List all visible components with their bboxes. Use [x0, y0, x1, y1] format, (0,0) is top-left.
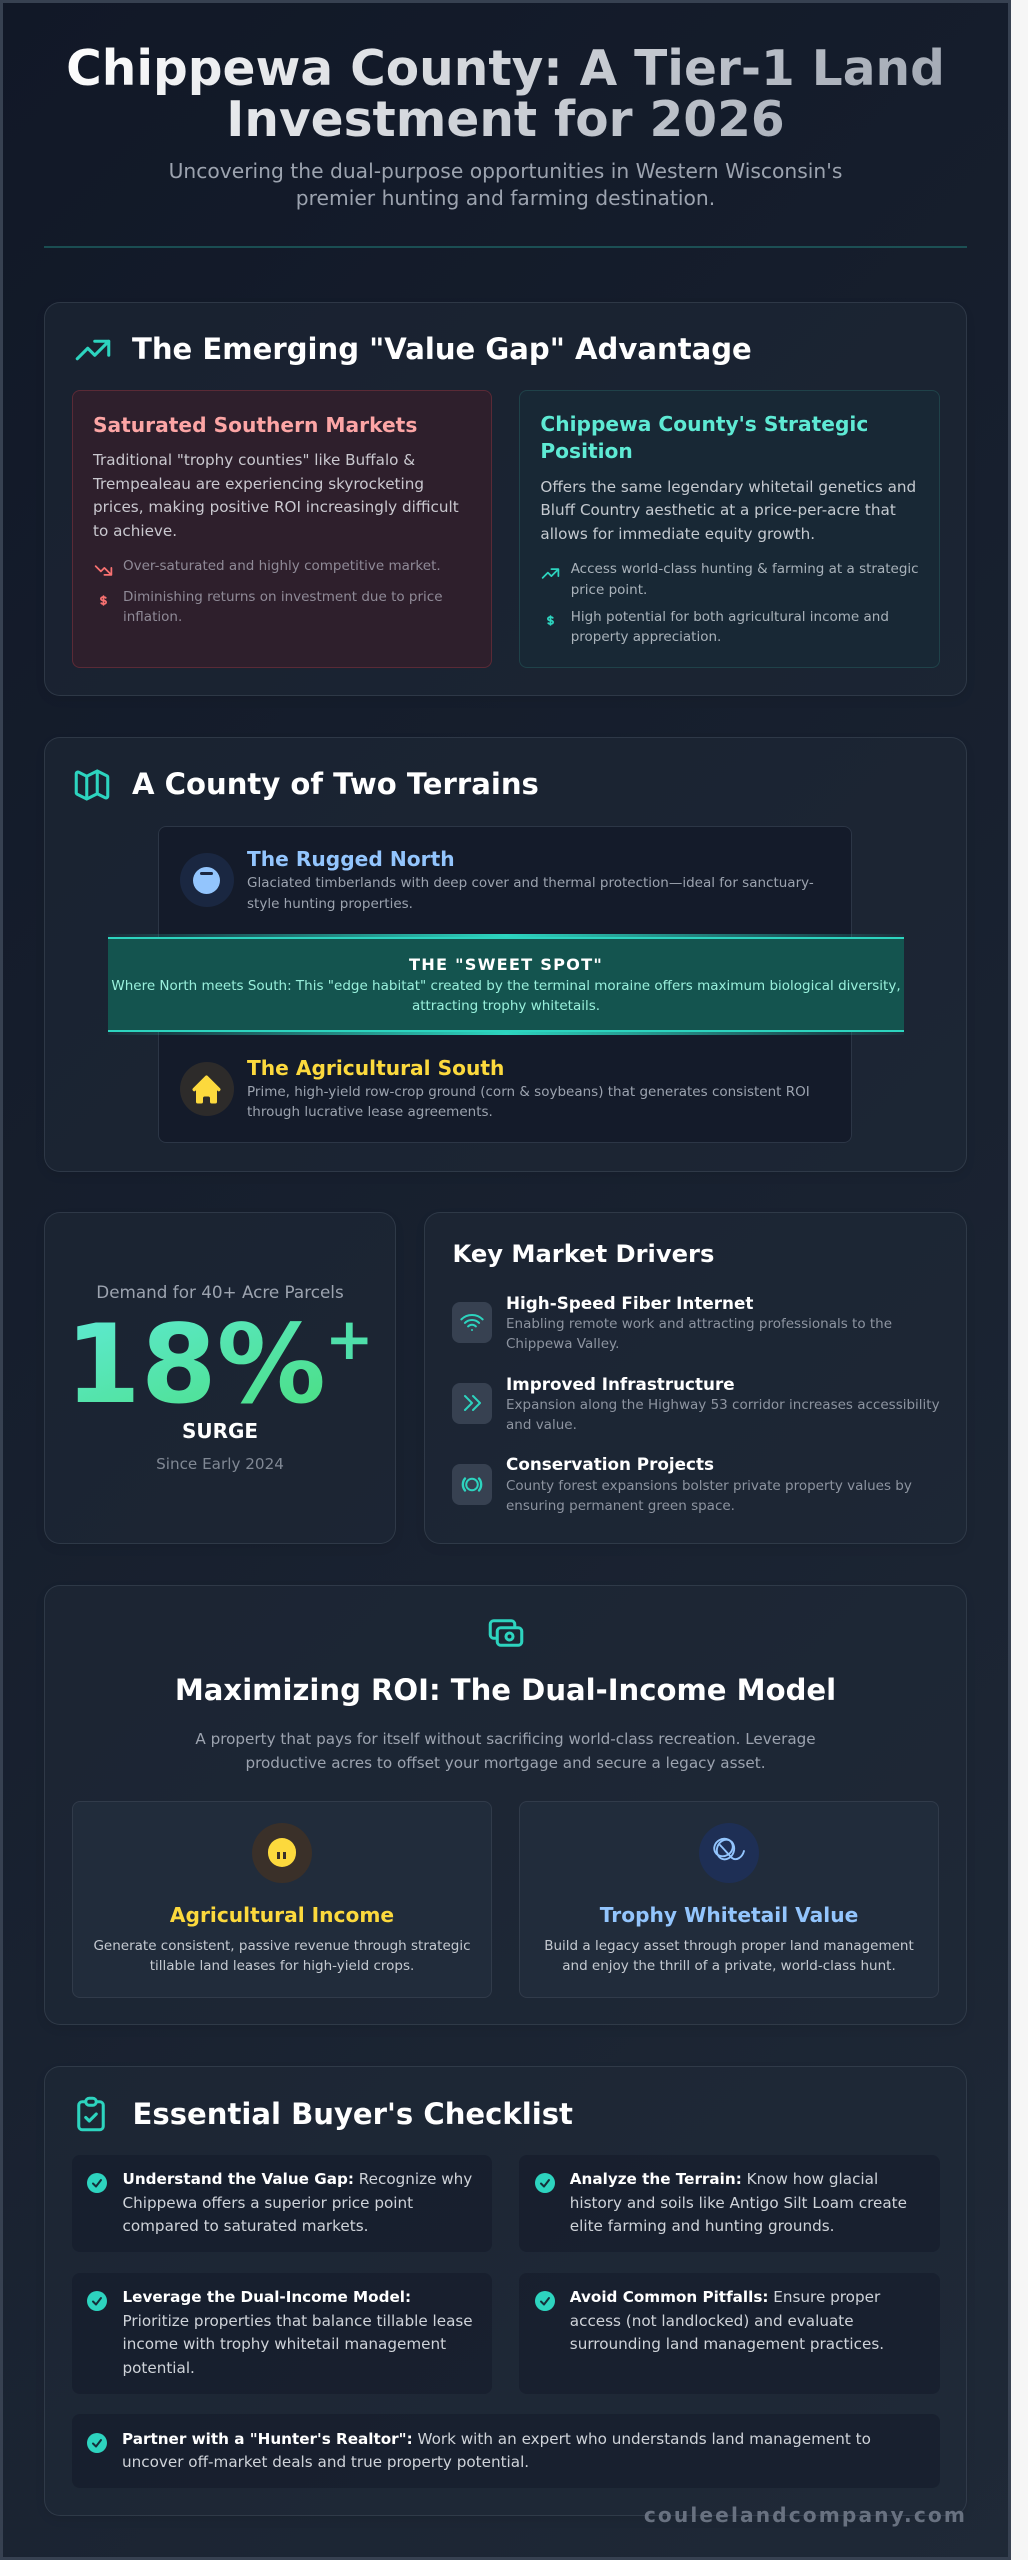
- panel: dual-income model: [44, 1585, 967, 2025]
- heading: strategic position: Position: [540, 439, 633, 463]
- heading: buyer's checklist: Essential Buyer's Checklist: [132, 2097, 573, 2131]
- text: dual income: Leverage the Dual-Income Model:: [122, 2288, 411, 2306]
- heading: key market drivers: Key Market Drivers: [452, 1240, 714, 1268]
- text: strategic position description: Bluff Country aesthetic at a price-per-acre that: [540, 501, 896, 519]
- subtitle: premier hunting and farming destination.: [296, 186, 715, 210]
- title: Chippewa County: A Tier-1 Land: [66, 41, 945, 97]
- icon: check: [87, 2433, 107, 2453]
- text: value gap: compared to saturated markets.: [122, 2217, 368, 2235]
- icon: north badge: [180, 853, 234, 907]
- watermark: couleelandcompany.com: [644, 2503, 967, 2527]
- text: agricultural income description: [93, 1938, 471, 1974]
- heading: agricultural income: Agricultural Income: [170, 1903, 394, 1927]
- text: terrain: history and soils like Antigo Silt Loam create: [570, 2194, 907, 2212]
- text: conservation description: County forest expansions bolster private property values by: [506, 1478, 912, 1494]
- text: sweet spot description: attracting trophy whitetails.: [412, 998, 600, 1014]
- icon: coin: [268, 1838, 296, 1867]
- panel: saturated southern markets: [72, 390, 492, 668]
- panel: agricultural income: [72, 1801, 492, 1998]
- text: world-class access point: price point.: [571, 582, 647, 598]
- icon: trending up: [76, 340, 110, 360]
- heading: trophy whitetail value: Trophy Whitetail Value: [600, 1903, 858, 1927]
- text: diminishing returns point: inflation.: [123, 609, 182, 625]
- text: dual income: Prioritize properties that balance tillable lease: [122, 2312, 473, 2330]
- heading: strategic position: Chippewa County's Strategic: [540, 412, 868, 436]
- panel: terrain stack: [158, 826, 852, 1143]
- icon: dollar small: [547, 615, 554, 626]
- text: saturated markets description: Traditional "trophy counties" like Buffalo &: [93, 451, 415, 469]
- checklist item: pitfalls: [519, 2273, 940, 2394]
- text: pitfalls: surrounding land management practices.: [570, 2335, 884, 2353]
- icon: trending down: [94, 565, 112, 576]
- text: fiber internet description: Enabling remote work and attracting professionals to the: [506, 1316, 892, 1332]
- text: sweet spot description: Where North meets South: This "edge habitat" created by the terminal moraine offers maximum biological diversity,: [111, 978, 901, 994]
- text: rugged north description: Glaciated timberlands with deep cover and thermal protection—ideal for sanctuary-: [247, 875, 814, 891]
- text: diminishing returns point: Diminishing returns on investment due to price: [123, 589, 443, 605]
- text: hunter's realtor: uncover off-market deals and true property potential.: [122, 2453, 529, 2471]
- text: saturated markets description: to achieve.: [93, 522, 177, 540]
- icon: looped lines: [713, 1838, 745, 1860]
- text: agricultural income description: tillable land leases for high-yield crops.: [150, 1958, 414, 1974]
- checklist item: terrain: [519, 2155, 940, 2252]
- heading: agricultural south: The Agricultural South: [247, 1056, 504, 1080]
- icon: south badge: [180, 1062, 234, 1116]
- text: strategic position description: Offers the same legendary whitetail genetics and: [540, 478, 916, 496]
- text: dual income: income with trophy whitetail management: [122, 2335, 446, 2353]
- heading: saturated markets: Saturated Southern Markets: [93, 413, 417, 437]
- text: infrastructure description: [506, 1397, 940, 1433]
- text: surge: SURGE: [182, 1419, 258, 1443]
- text: fiber internet description: [506, 1316, 892, 1352]
- callout: sweet spot: [108, 937, 904, 1032]
- icon: clipboard check: [77, 2096, 105, 2132]
- heading: dual-income model: Maximizing ROI: The Dual-Income Model: [175, 1673, 836, 1707]
- checklist item: dual income: [72, 2273, 492, 2394]
- text: strategic position description: allows for immediate equity growth.: [540, 525, 815, 543]
- text: agricultural income description: Generate consistent, passive revenue through strategic: [93, 1938, 471, 1954]
- text: hunter's realtor: Partner with a "Hunter's Realtor": Work with an expert who understands land management to: [122, 2430, 871, 2448]
- text: rugged north description: [247, 875, 814, 912]
- icon: check: [535, 2173, 555, 2193]
- panel: buyer's checklist: [44, 2066, 967, 2516]
- text: saturated markets description: prices, making positive ROI increasingly difficult: [93, 498, 459, 516]
- panel: value gap advantage: [44, 302, 967, 696]
- text: high potential point: [571, 609, 889, 645]
- title: Investment for 2026: [226, 92, 785, 148]
- text: dual-income intro: [195, 1730, 816, 1772]
- text: world-class access point: Access world-class hunting & farming at a strategic: [571, 561, 919, 577]
- text: saturated markets description: Trempealeau are experiencing skyrocketing: [93, 475, 424, 493]
- text: since early 2024: Since Early 2024: [156, 1455, 284, 1473]
- icon: wifi: [452, 1302, 492, 1343]
- text: high potential point: High potential for both agricultural income and: [571, 609, 889, 625]
- icon: conservation ring: [452, 1464, 492, 1505]
- icon: north glyph: [193, 866, 220, 894]
- text: high potential point: property appreciation.: [571, 629, 721, 645]
- text: hunter's realtor: [122, 2430, 871, 2471]
- text: pitfalls: [570, 2288, 884, 2353]
- text: dual-income intro: productive acres to offset your mortgage and secure a legacy asset.: [245, 1754, 766, 1772]
- panel: strategic position: [519, 390, 940, 668]
- text: saturated markets description: [92, 451, 459, 540]
- text: pitfalls: Avoid Common Pitfalls: Ensure proper: [570, 2288, 880, 2306]
- text: infrastructure description: and value.: [506, 1417, 577, 1433]
- heading: infrastructure: Improved Infrastructure: [506, 1374, 735, 1394]
- panel: trophy whitetail value: [519, 1801, 939, 1998]
- text: terrain: elite farming and hunting grounds.: [570, 2217, 834, 2235]
- text: trophy whitetail description: Build a legacy asset through proper land management: [544, 1938, 914, 1954]
- text: strategic position description: [540, 478, 916, 543]
- text: agricultural south description: Prime, high-yield row-crop ground (corn & soybeans) that generates consistent ROI: [247, 1084, 810, 1100]
- checklist item: hunter's realtor: [72, 2414, 940, 2488]
- heading: two terrains: A County of Two Terrains: [132, 767, 539, 801]
- text: pitfalls: access (not landlocked) and evaluate: [570, 2312, 854, 2330]
- text: conservation description: ensuring permanent green space.: [506, 1498, 735, 1514]
- icon: map: [74, 769, 110, 801]
- text: value gap: Understand the Value Gap: Recognize why: [122, 2170, 472, 2188]
- text: dual income: potential.: [122, 2359, 195, 2377]
- text: sweet spot description: [111, 978, 901, 1014]
- checklist item: value gap: [72, 2155, 492, 2252]
- text: terrain: Analyze the Terrain: Know how glacial: [570, 2170, 878, 2188]
- icon: chevrons: [452, 1383, 492, 1424]
- icon: home: [192, 1075, 220, 1104]
- heading: conservation: Conservation Projects: [506, 1454, 714, 1474]
- text: trophy whitetail description: [544, 1938, 914, 1974]
- title: [60, 44, 951, 146]
- stat: plus sign: +: [325, 1305, 374, 1373]
- icon: check: [87, 2173, 107, 2193]
- text: dual-income intro: A property that pays for itself without sacrificing world-class recreation. Leverage: [195, 1730, 816, 1748]
- text: world-class access point: [570, 561, 919, 598]
- icon: agricultural badge: [252, 1822, 312, 1882]
- text: infrastructure description: Expansion along the Highway 53 corridor increases accessibility: [506, 1397, 940, 1413]
- subtitle: Uncovering the dual-purpose opportunities in Western Wisconsin's: [169, 159, 842, 183]
- text: terrain: [570, 2170, 907, 2235]
- icon: dollar: [100, 595, 107, 606]
- heading: value gap: The Emerging "Value Gap" Advantage: [132, 332, 752, 366]
- panel: two terrains: [44, 737, 967, 1172]
- text: diminishing returns point: [123, 589, 443, 625]
- subtitle: [169, 159, 842, 210]
- heading: strategic position: [540, 412, 868, 463]
- text: over-saturated point: Over-saturated and highly competitive market.: [123, 558, 441, 574]
- icon: check: [535, 2291, 555, 2311]
- text: value gap: [122, 2170, 472, 2235]
- text: stat label: Demand for 40+ Acre Parcels: [96, 1282, 344, 1302]
- heading: fiber internet: High-Speed Fiber Internet: [506, 1292, 753, 1312]
- text: value gap: Chippewa offers a superior price point: [122, 2194, 413, 2212]
- text: rugged north description: style hunting properties.: [247, 896, 413, 912]
- panel: key market drivers: [424, 1212, 967, 1544]
- heading: rugged north: The Rugged North: [247, 847, 455, 871]
- text: trophy whitetail description: and enjoy the thrill of a private, world-class hunt.: [562, 1958, 896, 1974]
- panel: demand stat: [44, 1212, 396, 1544]
- text: dual income: [122, 2288, 473, 2377]
- heading: sweet spot: THE "SWEET SPOT": [409, 955, 603, 974]
- icon: trending up small: [542, 568, 560, 579]
- icon: check: [87, 2291, 107, 2311]
- stat: 18 percent: 18%: [65, 1301, 326, 1428]
- text: fiber internet description: Chippewa Valley.: [506, 1336, 619, 1352]
- icon: cash: [488, 1619, 524, 1647]
- text: conservation description: [506, 1478, 912, 1514]
- icon: whitetail badge: [699, 1822, 759, 1882]
- text: agricultural south description: through lucrative lease agreements.: [247, 1104, 493, 1120]
- text: agricultural south description: [247, 1084, 810, 1120]
